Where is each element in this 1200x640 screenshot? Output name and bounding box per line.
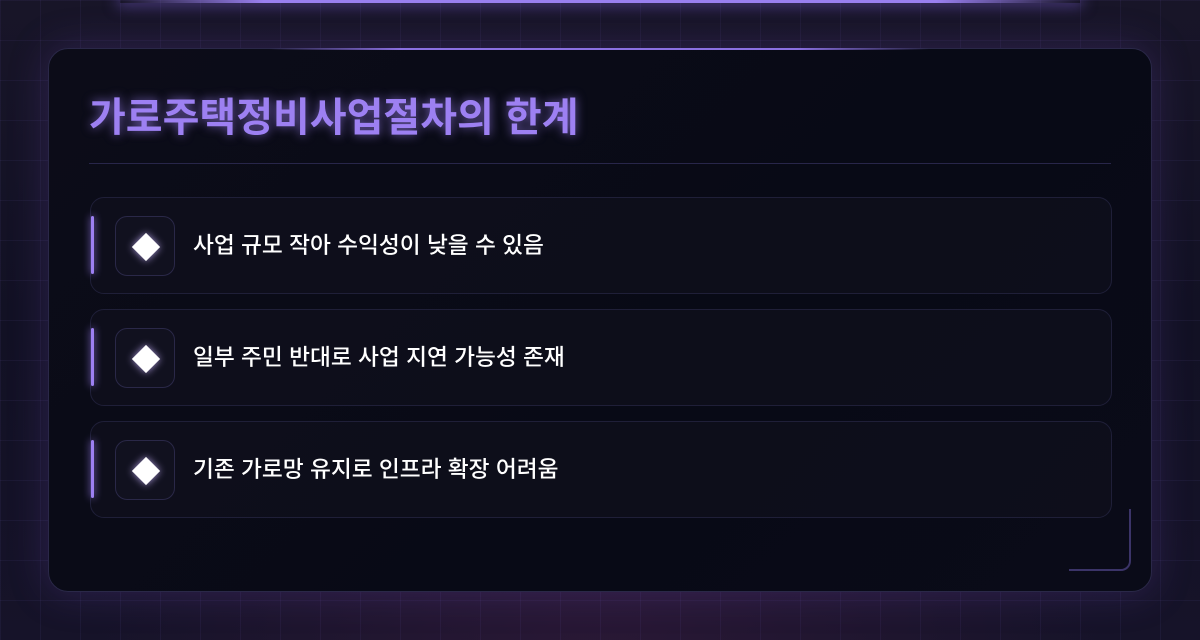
panel: main card: [48, 48, 1152, 592]
icon: diamond: [115, 216, 175, 276]
item 1: [90, 197, 1112, 294]
icon: diamond: [115, 328, 175, 388]
text 3: 기존 가로망 유지로 인프라 확장 어려움: [193, 456, 558, 482]
text 2: 일부 주민 반대로 사업 지연 가능성 존재: [193, 344, 565, 370]
top glow line: [120, 0, 1080, 3]
text 1: 사업 규모 작아 수익성이 낮을 수 있음: [193, 232, 544, 258]
icon: diamond: [115, 440, 175, 500]
title: 가로주택정비사업절차의 한계: [89, 96, 579, 140]
item 2: [90, 309, 1112, 406]
item 3: [90, 421, 1112, 518]
corner bracket: [1069, 509, 1131, 571]
